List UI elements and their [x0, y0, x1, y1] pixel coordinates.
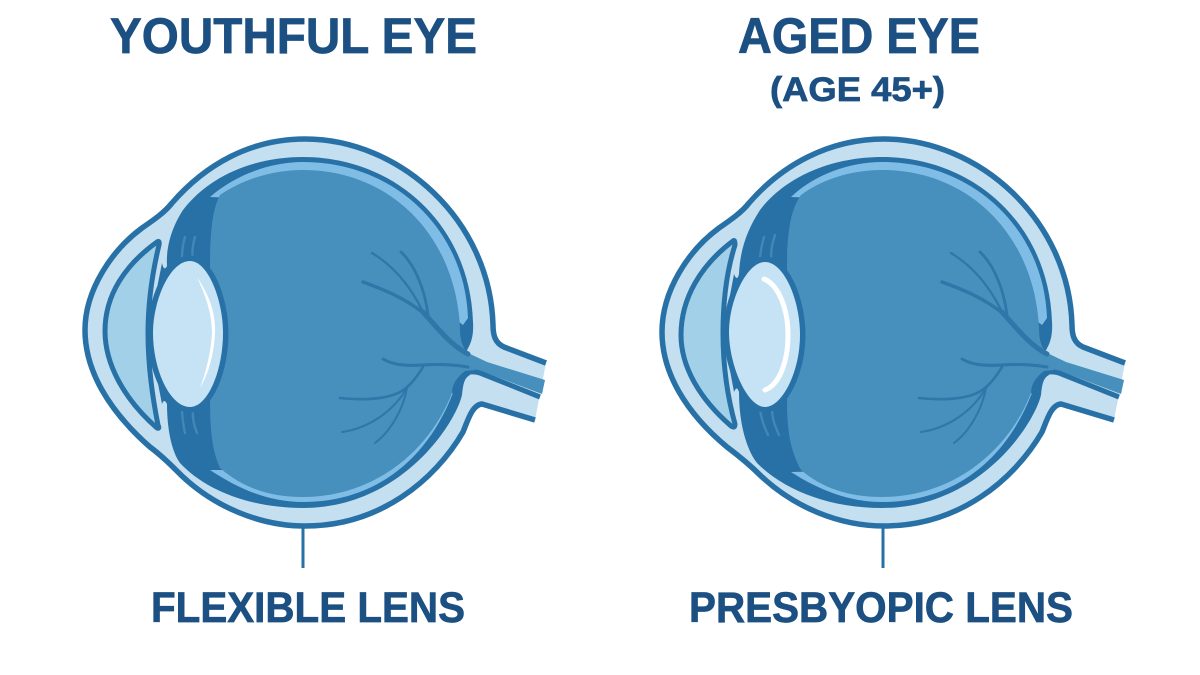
outer sclera fill — [85, 139, 546, 526]
inner dark choroid layer — [723, 157, 1052, 508]
nerve lower edge — [1039, 372, 1119, 397]
outer sclera outline — [85, 139, 546, 526]
ciliary streaks — [760, 235, 779, 435]
lens highlight — [764, 279, 788, 390]
outer sclera fill — [662, 139, 1125, 526]
diagram: youthful eye — [85, 139, 546, 526]
label: presbyopic lens: PRESBYOPIC LENS — [689, 584, 1073, 632]
retina band — [210, 162, 468, 502]
retina band — [791, 162, 1047, 502]
cornea chamber — [681, 240, 735, 427]
label: flexible lens: FLEXIBLE LENS — [151, 584, 465, 632]
vitreous body — [210, 170, 480, 497]
flexible lens — [153, 261, 223, 407]
optic nerve core — [1042, 352, 1124, 394]
pointer line: presbyopic lens — [882, 528, 884, 568]
ciliary streaks — [182, 237, 197, 433]
blood vessels — [919, 252, 1047, 443]
presbyopic lens — [729, 262, 800, 407]
subtitle: age 45+: (AGE 45+) — [770, 71, 945, 109]
nerve lower edge — [460, 372, 540, 397]
vitreous body — [787, 170, 1059, 497]
blood vessels — [340, 252, 468, 443]
optic nerve core — [463, 352, 545, 394]
title: youthful eye: YOUTHFUL EYE — [110, 8, 477, 64]
title: aged eye: AGED EYE — [738, 8, 980, 64]
cornea chamber — [105, 241, 159, 428]
diagram: aged eye — [662, 139, 1125, 526]
inner dark choroid layer — [148, 157, 473, 508]
outer sclera outline — [662, 139, 1125, 526]
lens highlight — [197, 277, 215, 388]
pointer line: flexible lens — [302, 528, 304, 568]
